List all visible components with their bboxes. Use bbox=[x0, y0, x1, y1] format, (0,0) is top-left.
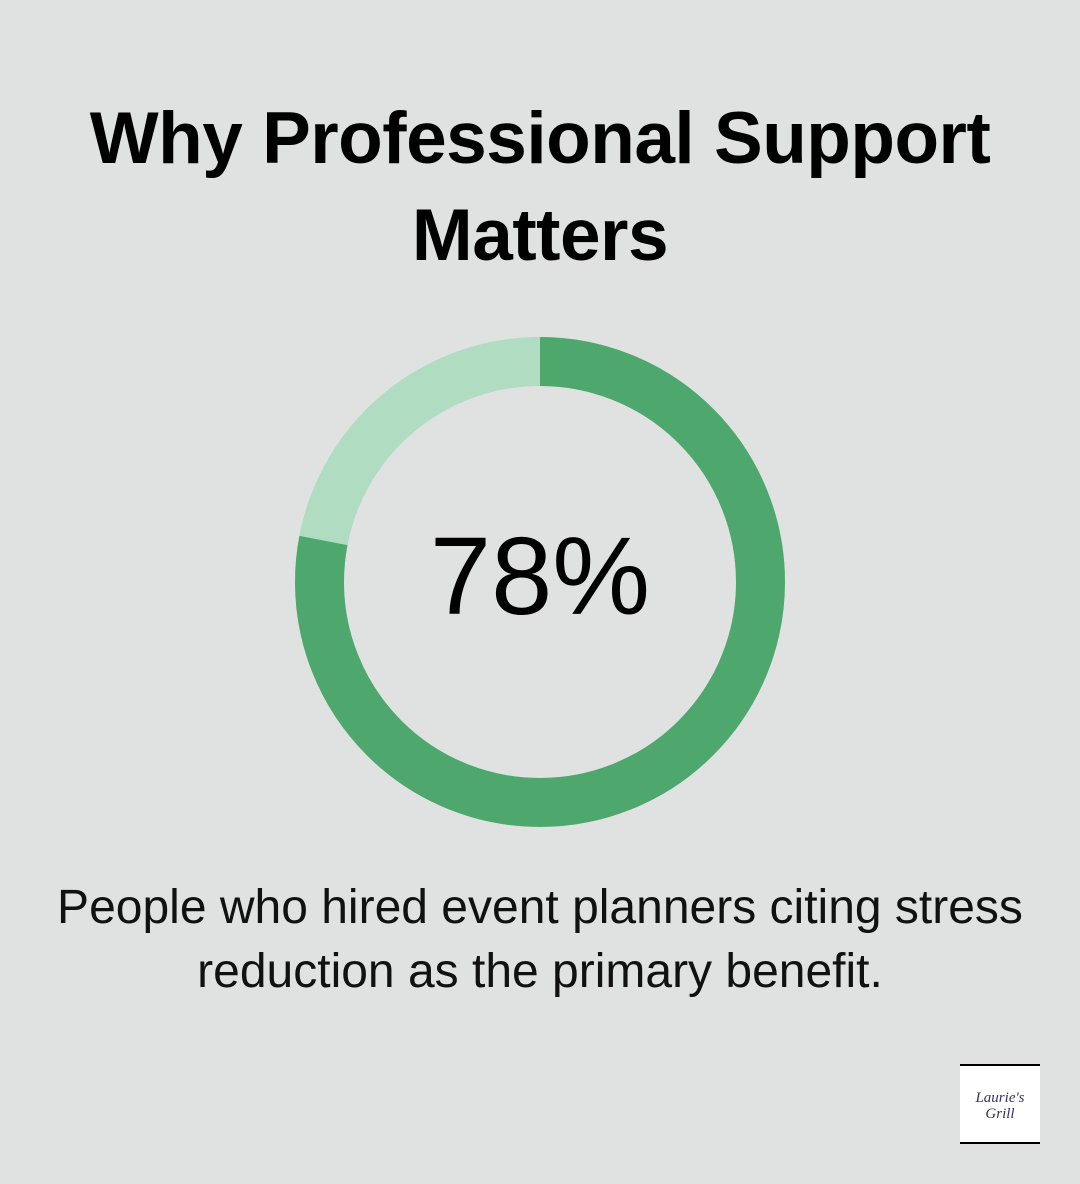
subtitle text: People who hired event planners citing stress bbox=[57, 881, 1023, 934]
logo: Laurie's bbox=[975, 1090, 1025, 1106]
title: Matters bbox=[412, 195, 668, 276]
subtitle text: reduction as the primary benefit. bbox=[197, 945, 883, 998]
logo bbox=[960, 1064, 1040, 1144]
donut chart: 78% bbox=[430, 515, 650, 638]
logo: Grill bbox=[985, 1106, 1015, 1122]
subtitle text bbox=[57, 881, 1023, 998]
title: Why Professional Support bbox=[90, 98, 990, 179]
title bbox=[90, 98, 990, 276]
